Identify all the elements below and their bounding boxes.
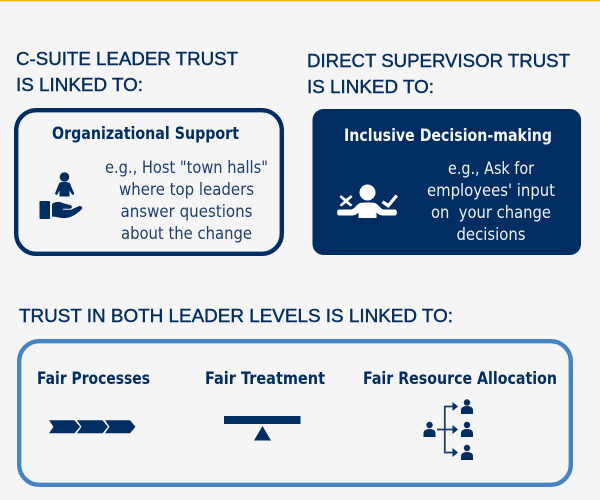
- icon: process chevrons: [49, 420, 136, 433]
- heading: C-suite leader trust: [16, 48, 238, 95]
- heading: C-suite leader trust: C-SUITE LEADER TRUST: [16, 48, 238, 69]
- label: fair treatment: Fair Treatment: [205, 369, 325, 388]
- heading: direct supervisor trust: IS LINKED TO:: [307, 76, 434, 97]
- heading: direct supervisor trust: [307, 50, 570, 97]
- body text: employee input example: [427, 159, 555, 244]
- card title: organizational support: Organizational Support: [52, 124, 239, 143]
- body text: town halls example: [105, 158, 268, 243]
- icon: person weighing a cross and a check: [337, 184, 398, 218]
- icon: resource distribution to people: [424, 399, 473, 460]
- body text: employee input example: decisions: [456, 225, 526, 244]
- icon: person held in open hand: [40, 172, 82, 219]
- card title: inclusive decision-making: Inclusive Decision-making: [344, 126, 552, 145]
- body text: town halls example: e.g., Host "town halls": [105, 158, 268, 177]
- heading: trust in both leader levels: TRUST IN BOTH LEADER LEVELS IS LINKED TO:: [19, 305, 453, 326]
- panel: trust in both leader levels: [19, 305, 571, 485]
- label: fair processes: Fair Processes: [37, 369, 150, 388]
- body text: town halls example: where top leaders: [119, 180, 254, 199]
- body text: town halls example: answer questions: [120, 202, 252, 221]
- card: fair outcomes: [19, 341, 571, 485]
- panel: C-suite leader trust: [16, 48, 282, 254]
- card: organizational support: [16, 110, 282, 254]
- heading: C-suite leader trust: IS LINKED TO:: [16, 74, 143, 95]
- body text: town halls example: about the change: [121, 224, 252, 243]
- body text: employee input example: employees' input: [427, 181, 555, 200]
- card: inclusive decision-making: [312, 109, 581, 255]
- body text: employee input example: on your change: [431, 203, 551, 222]
- icon: balance scale: [224, 416, 300, 440]
- label: fair resource allocation: Fair Resource Allocation: [363, 369, 557, 388]
- panel: direct supervisor trust: [307, 50, 581, 255]
- heading: direct supervisor trust: DIRECT SUPERVISOR TRUST: [307, 50, 570, 71]
- body text: employee input example: e.g., Ask for: [448, 159, 534, 178]
